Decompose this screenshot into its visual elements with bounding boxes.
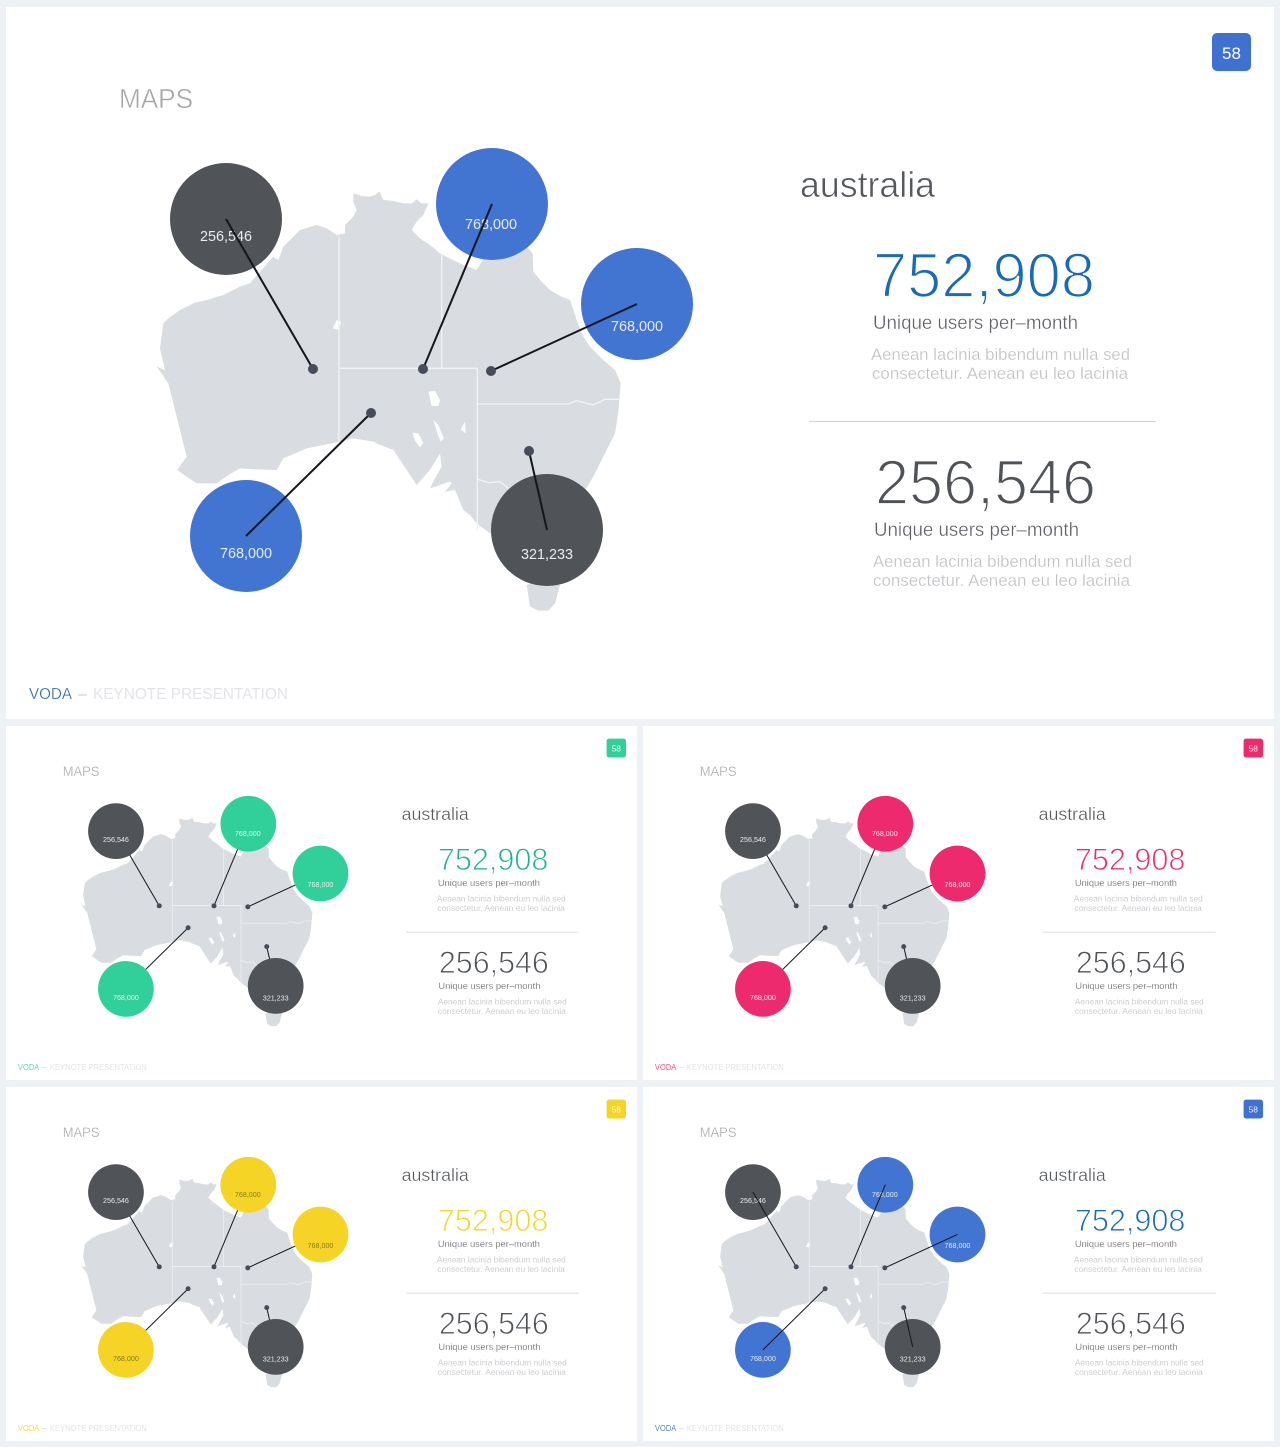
page number badge: 58: [1249, 1105, 1258, 1115]
statistic: users, blue: Unique users per–month: [1075, 1239, 1177, 1250]
connector lines and markers: [753, 1185, 957, 1350]
statistic: users, grey: Aenean lacinia bibendum nulla sed: [438, 996, 567, 1006]
statistic: users, pink: consectetur. Aenean eu leo lacinia: [1074, 903, 1202, 913]
statistic: users, green: consectetur. Aenean eu leo lacinia: [437, 903, 565, 913]
statistic: users, grey: Aenean lacinia bibendum nulla sed: [873, 552, 1132, 571]
data bubbles: 768,000: [235, 1191, 261, 1199]
footer: VODA: [29, 686, 72, 703]
statistic: users, grey: Aenean lacinia bibendum nulla sed: [438, 1357, 567, 1367]
data bubbles: 768,000: [872, 1191, 898, 1199]
panel: pink slide: [643, 726, 1274, 1080]
statistic: users, pink: Unique users per–month: [1075, 878, 1177, 889]
statistic: users, yellow: consectetur. Aenean eu leo lacinia: [437, 1264, 565, 1274]
map of Australia: [81, 818, 312, 1026]
statistic: users, green: 752,908: [438, 842, 548, 877]
statistic: users, grey: Unique users per–month: [1075, 981, 1177, 992]
footer: VODA: [655, 1424, 677, 1433]
statistic: users, yellow: 752,908: [438, 1203, 548, 1238]
footer: KEYNOTE PRESENTATION: [687, 1063, 784, 1072]
region heading: australia: [800, 164, 936, 205]
data bubbles: 256,546: [740, 1197, 766, 1205]
connector lines and markers: [116, 1185, 320, 1350]
panel: main slide: [6, 7, 1274, 719]
statistic: users, blue: consectetur. Aenean eu leo lacinia: [1074, 1264, 1202, 1274]
footer: KEYNOTE PRESENTATION: [687, 1424, 784, 1433]
region heading: australia: [1039, 1165, 1106, 1185]
data bubbles: 256,546: [103, 1197, 129, 1205]
map of Australia: [718, 818, 949, 1026]
data bubbles: 768,000: [308, 881, 333, 889]
footer: KEYNOTE PRESENTATION: [93, 686, 288, 703]
footer: VODA: [18, 1063, 40, 1072]
statistic: users, grey: [1075, 945, 1204, 1016]
statistic: users, green: Unique users per–month: [438, 878, 540, 889]
statistic: users, grey: Unique users per–month: [874, 520, 1079, 541]
statistic: users, grey: [438, 945, 567, 1016]
footer: VODA: [655, 1063, 677, 1072]
region heading: australia: [402, 1165, 469, 1185]
statistic: users, grey: Unique users per–month: [1075, 1342, 1177, 1353]
statistic: users, green: [437, 842, 566, 913]
data bubbles: 768,000: [945, 1242, 970, 1250]
page number badge: 58: [612, 744, 621, 754]
page number badge: [1244, 739, 1263, 758]
data bubbles: [88, 1157, 348, 1378]
data bubbles: 768,000: [945, 881, 970, 889]
data bubbles: 768,000: [465, 217, 517, 233]
statistic: users, blue: Aenean lacinia bibendum nulla sed: [1074, 1254, 1203, 1264]
data bubbles: 768,000: [611, 319, 663, 335]
slide title: MAPS: [700, 763, 737, 779]
page number badge: [607, 739, 626, 758]
statistic: users, grey: 256,546: [439, 1306, 549, 1341]
connector lines and markers: [753, 824, 957, 989]
statistic: users, blue: [871, 241, 1130, 383]
statistic: users, grey: Aenean lacinia bibendum nulla sed: [1075, 996, 1204, 1006]
data bubbles: 768,000: [113, 1355, 139, 1363]
statistic: users, grey: Aenean lacinia bibendum nulla sed: [1075, 1357, 1204, 1367]
panel: blue slide: [643, 1087, 1274, 1441]
data bubbles: 256,546: [103, 836, 129, 844]
data bubbles: 768,000: [750, 994, 776, 1002]
page number badge: 58: [1249, 744, 1258, 754]
data bubbles: [725, 1157, 985, 1378]
footer: –: [679, 1424, 684, 1433]
footer: –: [679, 1063, 684, 1072]
data bubbles: 256,546: [200, 229, 252, 245]
region heading: australia: [402, 804, 469, 824]
data bubbles: 321,233: [900, 994, 926, 1002]
page number badge: [1244, 1100, 1263, 1119]
footer: –: [78, 686, 87, 703]
statistic: users, grey: consectetur. Aenean eu leo lacinia: [438, 1367, 566, 1377]
panel: yellow slide: [6, 1087, 637, 1441]
statistic: users, blue: consectetur. Aenean eu leo lacinia: [872, 364, 1129, 383]
statistic: users, pink: [1074, 842, 1203, 913]
statistic: users, pink: Aenean lacinia bibendum nulla sed: [1074, 893, 1203, 903]
statistic: users, blue: 752,908: [1075, 1203, 1185, 1238]
slide title: MAPS: [119, 83, 193, 114]
connector lines and markers: [226, 204, 637, 536]
page number badge: 58: [1222, 44, 1241, 63]
statistic: users, grey: consectetur. Aenean eu leo lacinia: [1075, 1006, 1203, 1016]
statistic: users, yellow: [437, 1203, 566, 1274]
statistic: users, pink: 752,908: [1075, 842, 1185, 877]
panel: green slide: [6, 726, 637, 1080]
footer: KEYNOTE PRESENTATION: [50, 1424, 147, 1433]
statistic: users, grey: [873, 448, 1132, 590]
statistic: users, green: Aenean lacinia bibendum nulla sed: [437, 893, 566, 903]
data bubbles: [170, 148, 693, 592]
data bubbles: [88, 796, 348, 1017]
slide title: MAPS: [63, 1124, 100, 1140]
footer: –: [42, 1063, 47, 1072]
map of Australia: [81, 1179, 312, 1387]
data bubbles: 768,000: [235, 830, 261, 838]
data bubbles: 768,000: [308, 1242, 333, 1250]
data bubbles: [725, 796, 985, 1017]
footer: VODA: [18, 1424, 40, 1433]
statistic: users, yellow: Aenean lacinia bibendum nulla sed: [437, 1254, 566, 1264]
statistic: users, grey: Unique users per–month: [438, 1342, 540, 1353]
statistic: users, grey: consectetur. Aenean eu leo lacinia: [873, 571, 1131, 590]
statistic: users, blue: Unique users per–month: [873, 313, 1078, 334]
region heading: australia: [1039, 804, 1106, 824]
data bubbles: 256,546: [740, 836, 766, 844]
statistic: users, grey: [438, 1306, 567, 1377]
slide title: MAPS: [700, 1124, 737, 1140]
page number badge: [1212, 33, 1251, 71]
statistic: users, blue: [1074, 1203, 1203, 1274]
data bubbles: 768,000: [750, 1355, 776, 1363]
page number badge: 58: [612, 1105, 621, 1115]
statistic: users, grey: [1075, 1306, 1204, 1377]
statistic: users, grey: 256,546: [1076, 1306, 1186, 1341]
map of Australia: [718, 1179, 949, 1387]
statistic: users, grey: 256,546: [439, 945, 549, 980]
statistic: users, grey: 256,546: [875, 448, 1096, 518]
footer: KEYNOTE PRESENTATION: [50, 1063, 147, 1072]
map of Australia: [157, 192, 621, 611]
slide title: MAPS: [63, 763, 100, 779]
statistic: users, grey: consectetur. Aenean eu leo lacinia: [1075, 1367, 1203, 1377]
statistic: users, grey: Unique users per–month: [438, 981, 540, 992]
data bubbles: 321,233: [521, 547, 573, 563]
footer: –: [42, 1424, 47, 1433]
data bubbles: 768,000: [220, 546, 272, 562]
data bubbles: 768,000: [872, 830, 898, 838]
page number badge: [607, 1100, 626, 1119]
data bubbles: 321,233: [263, 1355, 289, 1363]
data bubbles: 768,000: [113, 994, 139, 1002]
connector lines and markers: [116, 824, 320, 989]
statistic: users, grey: 256,546: [1076, 945, 1186, 980]
statistic: users, blue: Aenean lacinia bibendum nulla sed: [871, 345, 1130, 364]
statistic: users, blue: 752,908: [873, 241, 1095, 311]
data bubbles: 321,233: [263, 994, 289, 1002]
statistic: users, yellow: Unique users per–month: [438, 1239, 540, 1250]
data bubbles: 321,233: [900, 1355, 926, 1363]
statistic: users, grey: consectetur. Aenean eu leo lacinia: [438, 1006, 566, 1016]
